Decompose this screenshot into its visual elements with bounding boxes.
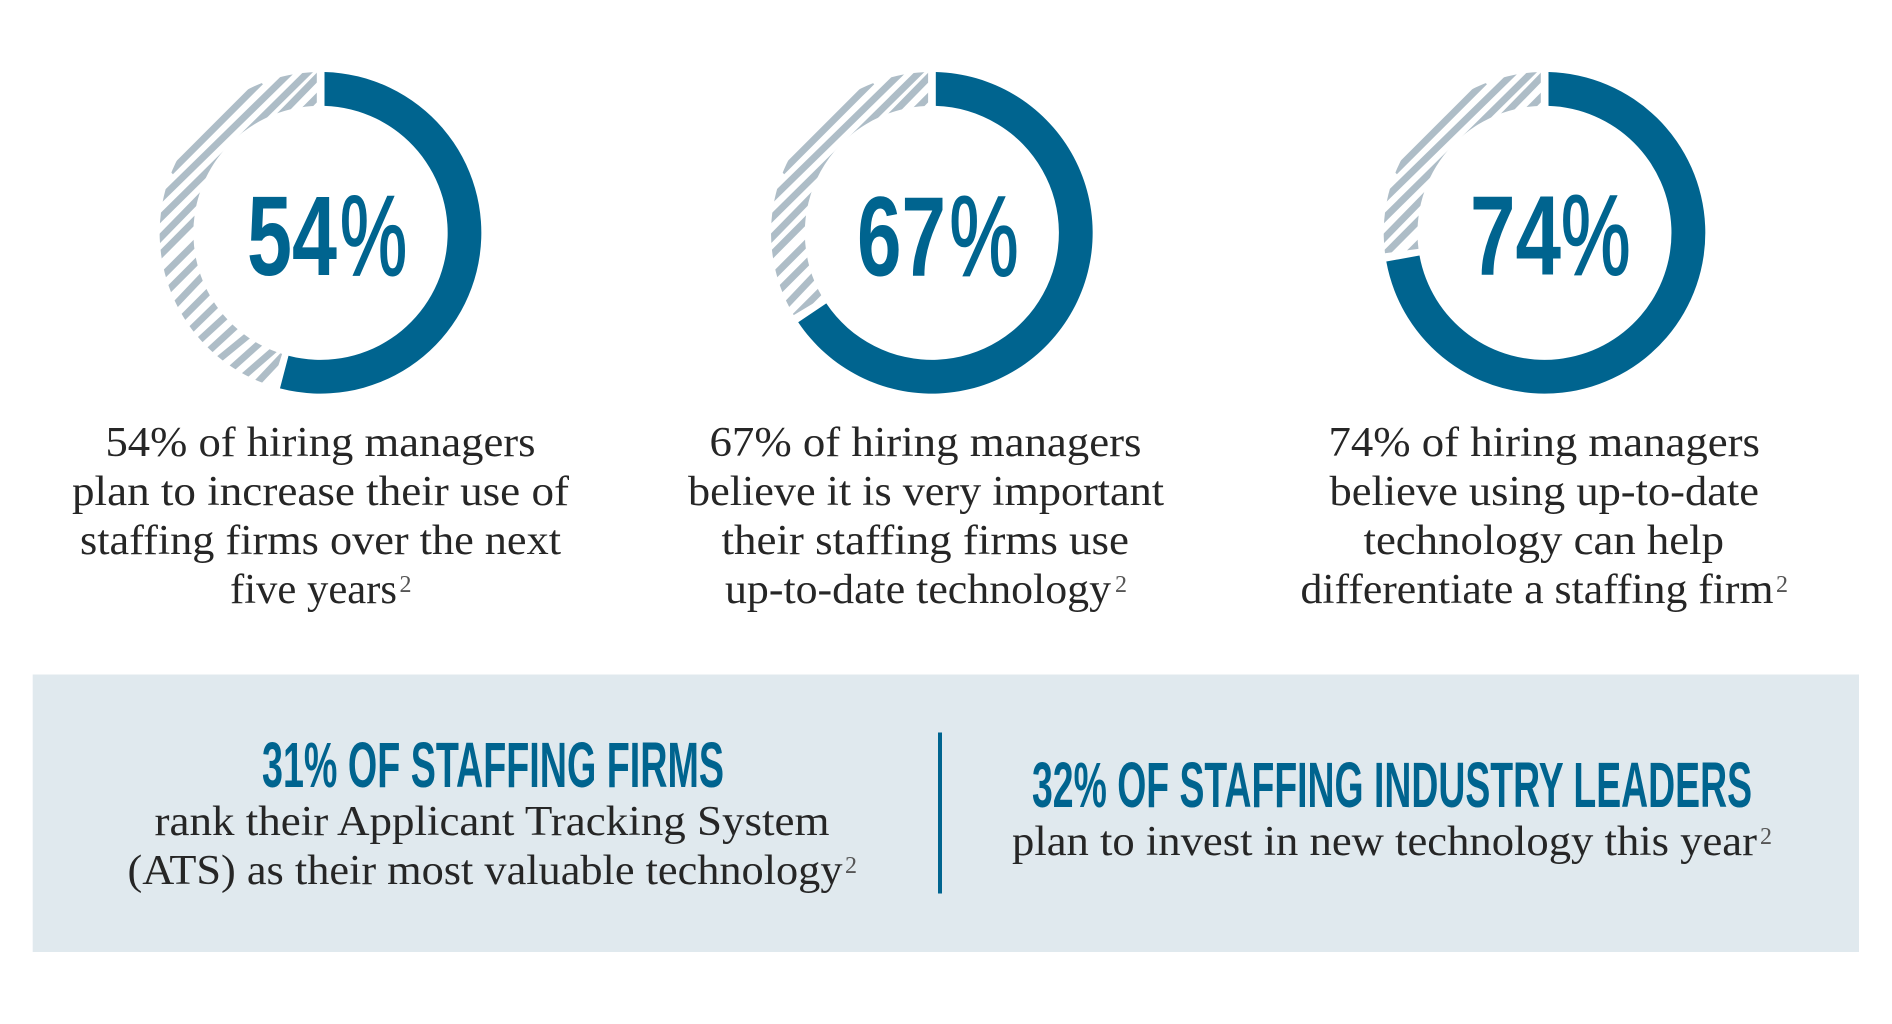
panel: 67% statistic — [688, 68, 1164, 613]
donut chart: 67% — [766, 68, 1093, 394]
callout body — [128, 799, 857, 894]
callout: 32% of staffing industry leaders — [1012, 749, 1772, 865]
description: 67% of hiring managers — [688, 420, 1164, 613]
description: 67% of hiring managers: 2 — [1115, 572, 1127, 598]
panel: 74% statistic — [1300, 68, 1788, 613]
callout body: rank their Applicant Tracking System — [154, 799, 830, 845]
big number: 54%: 54 — [247, 173, 337, 299]
callout body: 2 — [845, 853, 857, 879]
panel: bottom callout band — [33, 674, 1859, 952]
callout heading: 31% OF STAFFING FIRMS — [262, 729, 724, 801]
callout body: plan to invest in new technology this year — [1012, 819, 1757, 865]
description: 74% of hiring managers: 2 — [1776, 572, 1788, 598]
description: 74% of hiring managers: believe using up-to-date — [1330, 469, 1759, 515]
description: 54% of hiring managers: five years — [230, 567, 397, 613]
donut chart: 74% — [1378, 68, 1705, 394]
big number: 67%: 67 — [857, 174, 946, 300]
description: 67% of hiring managers: 67% of hiring managers — [710, 420, 1142, 466]
description: 67% of hiring managers: believe it is very important — [688, 469, 1164, 515]
description: 54% of hiring managers — [72, 420, 569, 613]
description: 54% of hiring managers: staffing firms over the next — [80, 518, 561, 564]
description: 74% of hiring managers — [1300, 420, 1788, 613]
callout body: (ATS) as their most valuable technology — [128, 848, 842, 894]
description: 54% of hiring managers: 54% of hiring managers — [106, 420, 536, 466]
description: 54% of hiring managers: plan to increase their use of — [72, 469, 569, 515]
description: 74% of hiring managers: 74% of hiring managers — [1328, 420, 1760, 466]
big number: 54%: % — [340, 173, 407, 299]
big number: 74%: 74 — [1470, 172, 1561, 298]
description: 74% of hiring managers: technology can help — [1364, 518, 1724, 564]
band background — [33, 674, 1859, 952]
big number: 67%: % — [950, 174, 1018, 300]
callout body: 2 — [1760, 824, 1772, 850]
callout: 31% of staffing firms — [128, 729, 857, 894]
vertical divider — [938, 732, 942, 894]
big number: 74%: % — [1561, 172, 1630, 298]
description: 74% of hiring managers: differentiate a staffing firm — [1300, 567, 1774, 613]
description: 54% of hiring managers: 2 — [400, 572, 412, 598]
donut chart: 54% — [154, 68, 481, 394]
description: 67% of hiring managers: up-to-date technology — [725, 567, 1111, 613]
panel: 54% statistic — [72, 68, 569, 613]
description: 67% of hiring managers: their staffing firms use — [722, 518, 1129, 564]
